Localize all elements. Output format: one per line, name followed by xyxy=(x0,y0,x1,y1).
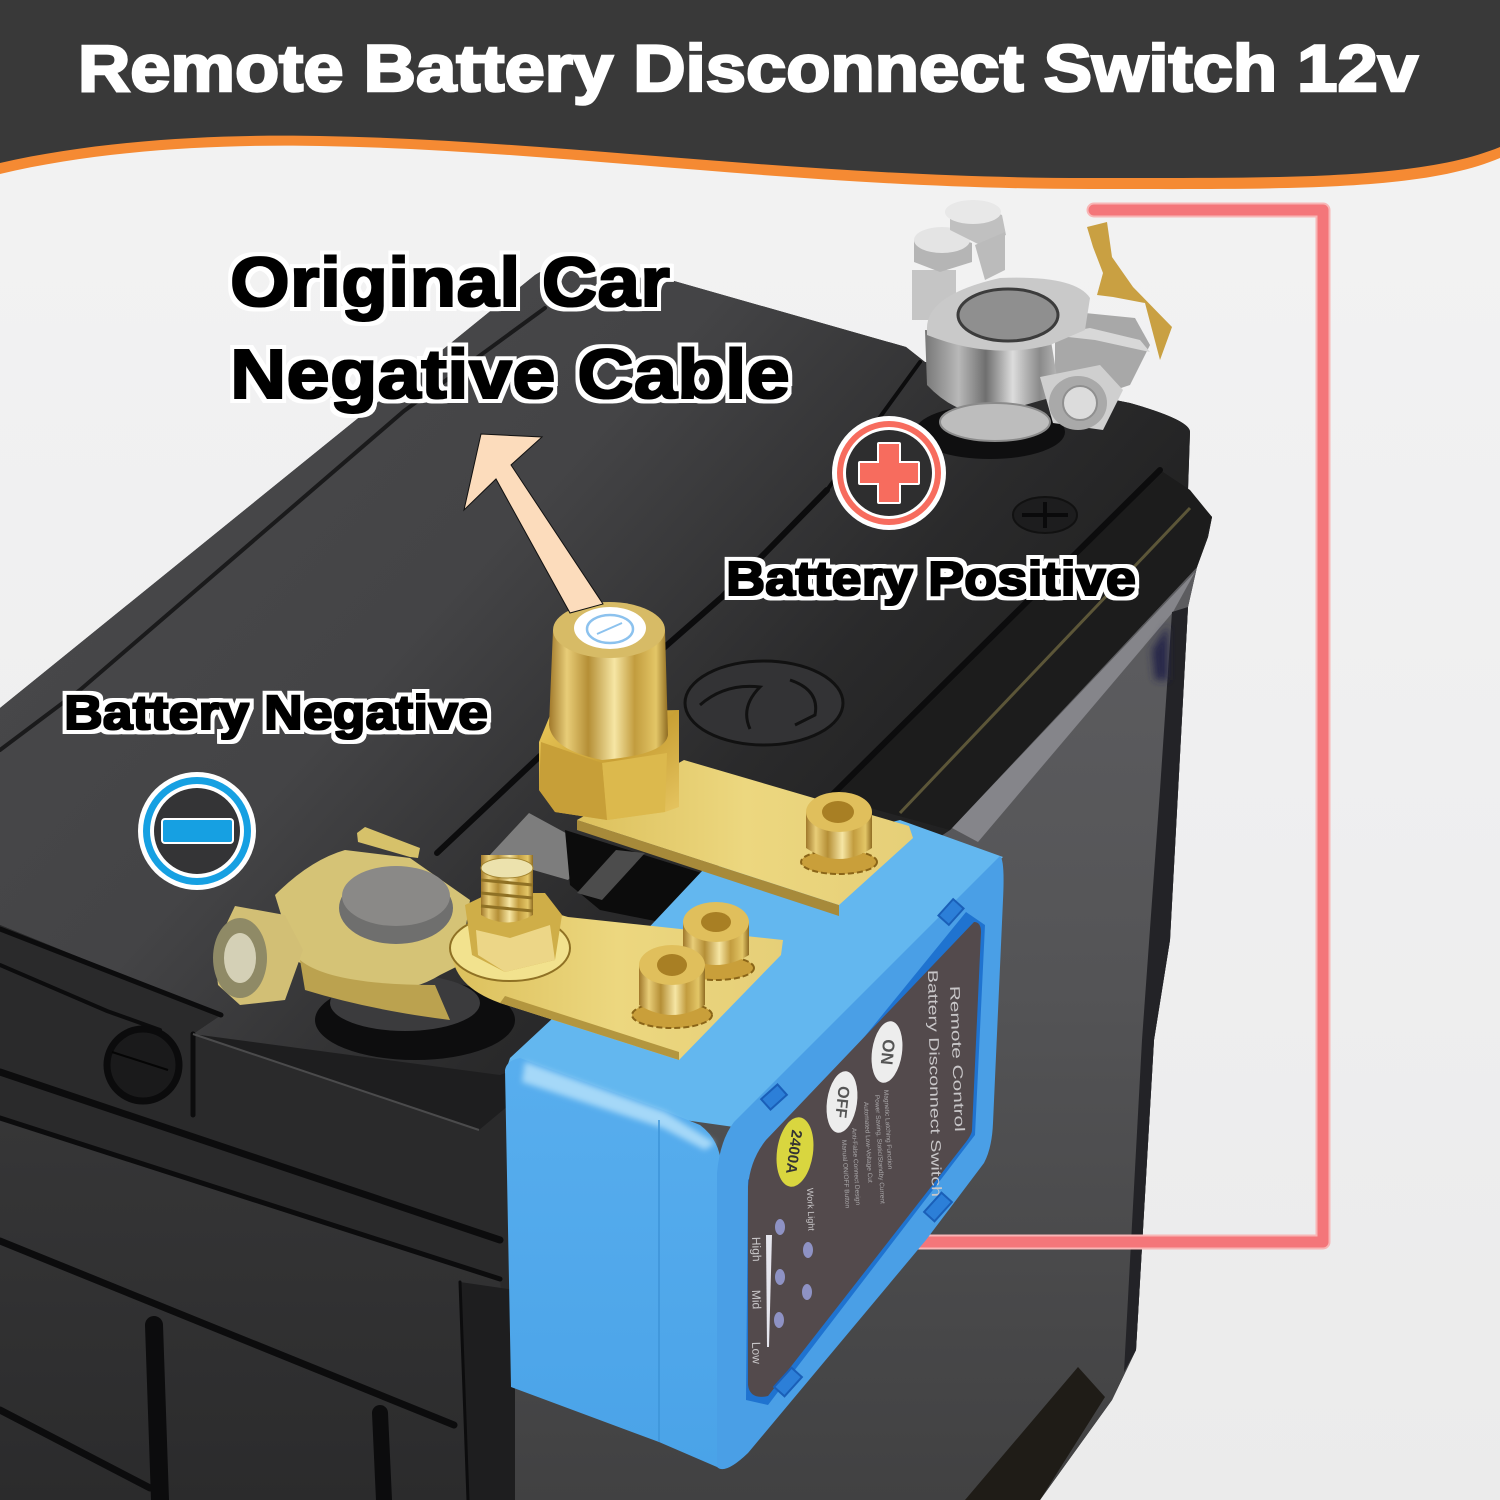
upper bolt xyxy=(945,200,1006,280)
arrow xyxy=(464,434,603,613)
cap top xyxy=(553,602,665,658)
box fold line xyxy=(658,1120,660,1442)
lighter front block highlight xyxy=(193,1034,479,1130)
clamp body xyxy=(275,850,470,991)
hex base xyxy=(539,710,679,820)
front screw xyxy=(632,945,712,1028)
terminal post xyxy=(958,289,1058,341)
right rim xyxy=(717,856,1004,1469)
clamp body xyxy=(925,330,1060,413)
battery side corner xyxy=(460,1282,515,1500)
battery xyxy=(0,270,1212,1500)
yellow badge xyxy=(772,1115,818,1189)
label strip one xyxy=(488,813,597,880)
lid lip near right edge xyxy=(830,470,1212,830)
rim clips xyxy=(761,899,964,1396)
off button xyxy=(823,1069,861,1135)
battery front block xyxy=(0,925,515,1500)
clamp ear xyxy=(1055,310,1150,395)
icon: plus badge xyxy=(832,416,946,530)
upper plate edge xyxy=(577,820,839,916)
washer xyxy=(940,403,1050,441)
clamp ring xyxy=(927,278,1090,351)
battery lower front wall xyxy=(0,1118,515,1500)
gold seam xyxy=(900,508,1190,813)
off button: OFF xyxy=(831,1085,852,1119)
indicator lights xyxy=(774,1219,813,1328)
glossy gap xyxy=(565,830,740,930)
level wedge xyxy=(766,1235,772,1347)
red wire xyxy=(915,210,1323,1242)
positive base xyxy=(915,405,1065,459)
plate text xyxy=(749,970,968,1364)
mid label: Mid xyxy=(749,1290,764,1309)
title: Remote Battery Disconnect Switch 12v xyxy=(78,31,1418,105)
hex nut xyxy=(213,906,303,1005)
orange wave xyxy=(0,0,1500,189)
nut xyxy=(1040,365,1123,430)
plate feature list: Magnetic Latching Function xyxy=(882,1090,893,1170)
lower plate edge xyxy=(500,996,679,1060)
front highlight xyxy=(522,1062,715,1150)
negative terminal xyxy=(213,827,470,1020)
work light label: Work Light xyxy=(805,1188,817,1231)
on button xyxy=(868,1019,906,1085)
upper bolt xyxy=(801,792,877,874)
top face xyxy=(505,820,1003,1127)
plate subtitle: Battery Disconnect Switch xyxy=(925,970,945,1197)
lower bolt xyxy=(912,227,972,320)
yellow badge: 2400A xyxy=(782,1129,805,1175)
vent cap knob xyxy=(107,1029,179,1101)
label: battery negative: Battery Negative xyxy=(64,687,488,740)
plate title: Remote Control xyxy=(947,986,968,1132)
icon: minus badge xyxy=(138,772,256,890)
battery lid top surface xyxy=(0,270,1212,1075)
lower lug xyxy=(300,960,450,1020)
label plate xyxy=(748,922,981,1397)
front face xyxy=(505,1058,721,1467)
cylinder xyxy=(549,630,668,760)
on button: ON xyxy=(877,1038,898,1066)
label strip two xyxy=(577,850,645,900)
plate feature list: Power Saving, Static/Standby Current xyxy=(873,1095,886,1204)
label: battery positive: Battery Positive xyxy=(726,553,1136,606)
label: original car negative cable xyxy=(230,243,790,413)
battery foot xyxy=(965,1367,1105,1500)
side dark edge xyxy=(1124,607,1188,1372)
gold cap switch xyxy=(539,602,679,820)
plate feature list: Automated Low-Voltage Cut xyxy=(862,1102,873,1183)
label: original car negative cable: Negative Cable xyxy=(230,335,790,413)
upper plate xyxy=(577,760,913,905)
upper gold bracket xyxy=(577,760,913,916)
positive terminal xyxy=(912,200,1172,459)
plate feature list: Anti-False Connect Design xyxy=(850,1128,861,1206)
flange nut xyxy=(450,855,570,981)
recycle logo circle xyxy=(685,661,843,745)
plate feature list: Manual ON/OFF Button xyxy=(840,1140,851,1209)
back screw xyxy=(678,902,754,980)
dark band xyxy=(0,0,1500,178)
header band xyxy=(0,0,1500,189)
label: original car negative cable: Original Car xyxy=(230,243,670,321)
side silver highlight xyxy=(952,572,1195,842)
plate feature list xyxy=(840,1090,893,1209)
lower gold bracket xyxy=(450,855,783,1060)
lower plate xyxy=(452,900,783,1060)
black terminal well negative xyxy=(315,980,515,1060)
power button xyxy=(574,607,646,649)
grey post base negative xyxy=(330,975,480,1031)
battery right side face xyxy=(515,567,1197,1500)
tab xyxy=(357,827,420,858)
high label: High xyxy=(749,1237,764,1262)
battery base silhouette xyxy=(0,270,1212,1500)
grey post xyxy=(339,866,453,944)
ear upper face xyxy=(1050,328,1150,352)
blue switch box xyxy=(505,820,1004,1469)
inner rim groove xyxy=(746,912,985,1405)
blue reflection xyxy=(1152,625,1168,680)
plus mould mark xyxy=(1013,497,1077,533)
low label: Low xyxy=(749,1342,764,1364)
gold lug xyxy=(1087,222,1172,360)
